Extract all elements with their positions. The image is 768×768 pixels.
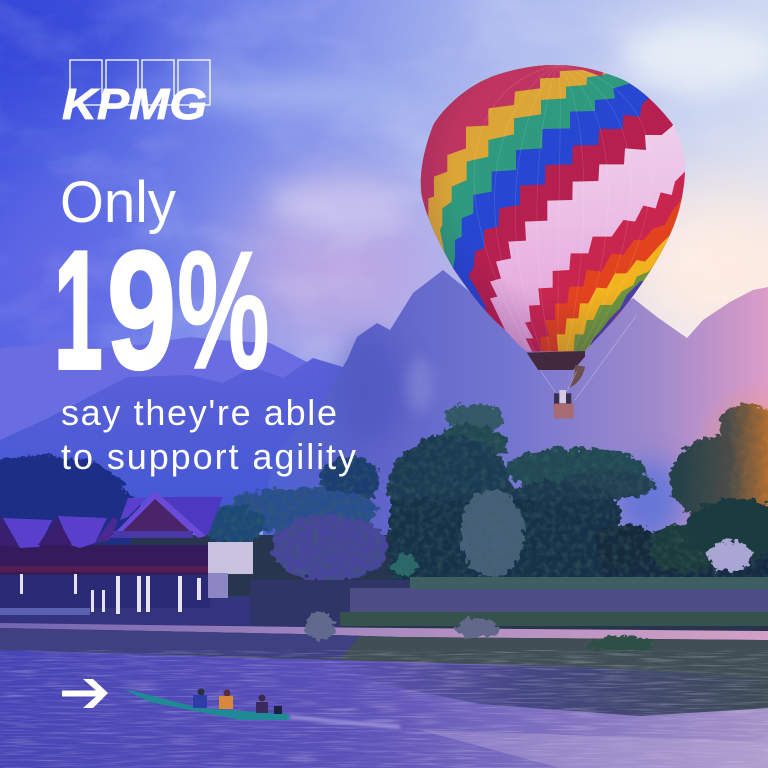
right tree group [670,405,768,562]
balloon envelope [420,65,685,352]
balloon skirt [527,351,585,370]
big number: 19%: % [177,215,270,404]
bushes on road [305,611,654,652]
house [0,491,253,615]
burner scoop [569,365,585,388]
river water [0,650,768,768]
ground left [0,596,340,630]
central mountain [260,270,768,560]
big number: 19% [54,215,270,404]
logo squares [70,60,210,105]
people in basket [554,390,571,404]
logo wordmark: KPMG [62,80,207,129]
mountains far left [0,337,345,520]
central tree group [205,404,768,581]
mountain rock face shading [338,335,684,540]
road [0,623,768,640]
orange sunset glow [690,380,768,520]
trees left background [0,456,140,545]
dark base of land [0,535,768,685]
big number: 19%: 1 [54,217,103,404]
caption: say they're able [61,392,337,433]
caption: to support agility [61,436,356,477]
hot air balloon [420,65,685,418]
heading: Only: Only [60,170,176,235]
caption [61,392,356,477]
river bank [0,628,768,678]
KPMG logo [62,60,210,129]
arrow icon [62,679,108,708]
white flowering tree [708,541,752,571]
ground vegetation right [250,577,768,626]
ropes [540,315,637,400]
long-tail boat [125,688,400,727]
basket [554,404,574,418]
mountains near left [0,358,345,520]
bank tint left [0,628,360,659]
big number: 19%: 9 [107,217,176,404]
